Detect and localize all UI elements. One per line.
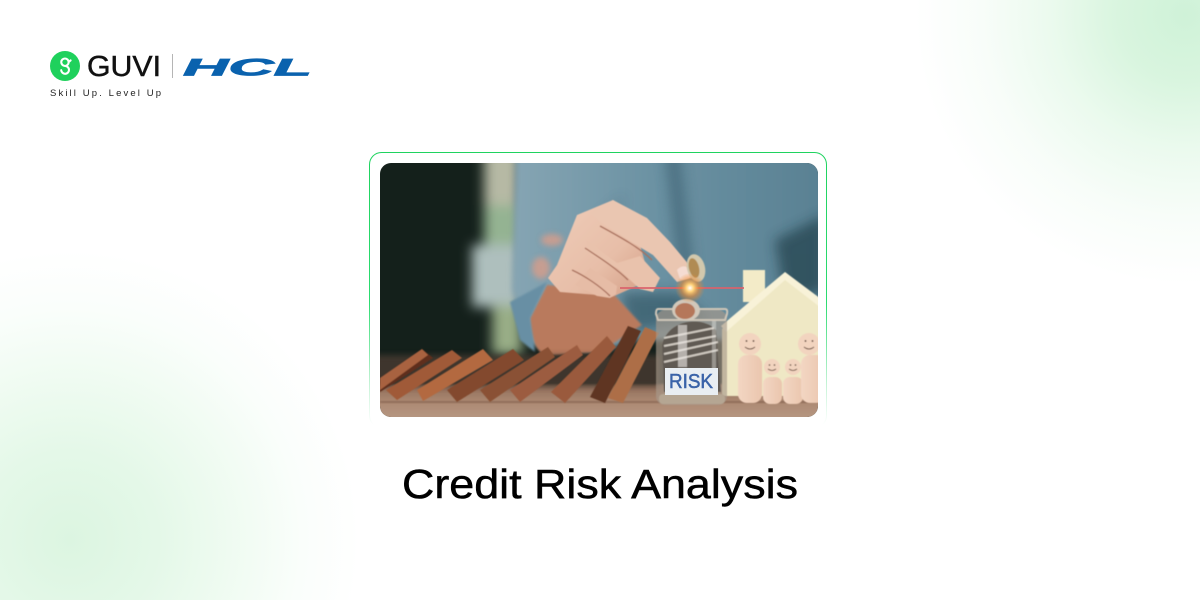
HCL wordmark: HCL: [183, 54, 312, 82]
middle finger: [612, 256, 660, 292]
jar base: [659, 394, 725, 404]
blurred shirt: [510, 163, 818, 354]
green glow bottom left: [0, 245, 365, 600]
coin pile: [662, 321, 721, 392]
RISK jar label: RISK: [669, 371, 714, 393]
panel: photo frame: [370, 152, 826, 428]
house model: [721, 270, 825, 396]
hand: [548, 200, 692, 298]
blurred foliage: [472, 150, 522, 355]
panel: credit risk photo: [380, 163, 818, 417]
photo backdrop: [380, 163, 818, 417]
figure: child right: [783, 359, 803, 404]
GUVI wordmark: GUVI: [87, 51, 161, 83]
blurred second hand: [532, 234, 563, 279]
finger creases: [572, 226, 652, 296]
sleeve cuff: [510, 282, 547, 352]
glass highlight: [678, 325, 687, 367]
wooden family figures: [738, 333, 825, 404]
index finger: [612, 200, 692, 282]
jar rim: [656, 309, 727, 320]
ring finger: [594, 282, 617, 298]
icon: GUVI green circle: [50, 51, 80, 81]
toppling wooden dominoes: [380, 326, 659, 403]
back of hand: [548, 200, 650, 297]
table back edge: [370, 355, 660, 387]
figure: adult right: [798, 333, 818, 404]
light flare across coin: [620, 273, 744, 303]
logo separator: [172, 54, 173, 78]
figure: child left: [763, 359, 782, 404]
jar body: [656, 310, 727, 405]
fingernail: [677, 266, 691, 280]
green glow top right: [900, 0, 1200, 300]
table front shading: [380, 401, 818, 403]
logo: GUVI and HCL: [50, 51, 312, 99]
shirt shadow folds: [618, 163, 818, 336]
glass jar with coins: [656, 299, 727, 405]
top coin: [672, 299, 700, 321]
table surface: [380, 383, 818, 417]
tagline: Skill Up. Level Up: [50, 88, 161, 99]
figure: adult left: [738, 333, 762, 403]
coin in fingers: [686, 254, 706, 282]
title: Credit Risk Analysis: [402, 461, 798, 507]
forearm: [530, 285, 642, 356]
